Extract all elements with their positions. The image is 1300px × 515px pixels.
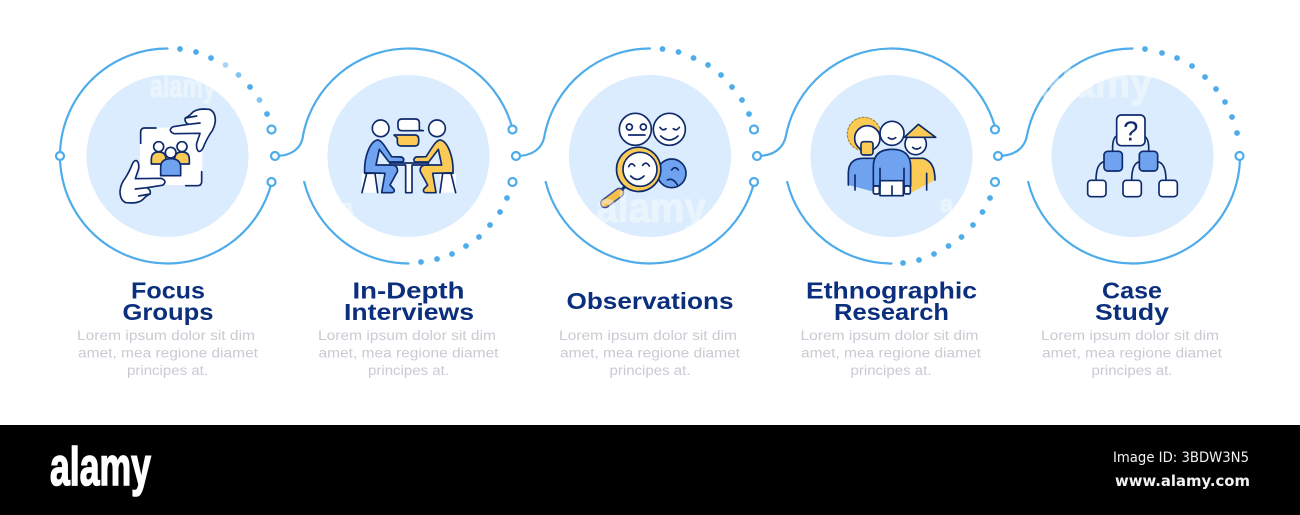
footer bar bbox=[0, 425, 1300, 515]
heading: Case bbox=[1102, 278, 1162, 304]
body text bbox=[559, 328, 740, 378]
background circle bbox=[328, 75, 490, 237]
icon: hands framing a group bbox=[120, 109, 215, 203]
watermarks: alamy bbox=[150, 68, 216, 104]
body text: Lorem ipsum dolor sit dim bbox=[559, 328, 737, 343]
panel: in-depth interviews bbox=[271, 49, 516, 378]
background circle bbox=[569, 75, 731, 237]
website: www.alamy.com bbox=[1115, 472, 1250, 490]
heading bbox=[344, 278, 474, 325]
body text bbox=[1041, 328, 1222, 378]
body text: Lorem ipsum dolor sit dim bbox=[318, 328, 496, 343]
heading: Ethnographic bbox=[806, 278, 977, 304]
background circle bbox=[86, 75, 248, 237]
heading: Research bbox=[834, 299, 949, 325]
icon: decision tree with question mark: ? bbox=[1123, 116, 1138, 147]
alamy logo: alamy bbox=[50, 437, 151, 497]
panel: ethnographic research bbox=[753, 49, 999, 378]
ring with dots bbox=[753, 49, 999, 266]
body text: Lorem ipsum dolor sit dim bbox=[800, 328, 978, 343]
ring with dots bbox=[271, 49, 516, 265]
panel: case study bbox=[994, 46, 1244, 378]
background circle bbox=[810, 75, 972, 237]
heading: Groups bbox=[122, 299, 214, 325]
body text: amet, mea regione diamet bbox=[560, 346, 740, 360]
background circle bbox=[1052, 75, 1214, 237]
body text bbox=[318, 328, 499, 378]
icon: decision tree with question mark bbox=[1088, 115, 1177, 197]
watermarks bbox=[150, 59, 1153, 231]
heading: Interviews bbox=[344, 299, 474, 325]
ring with dots bbox=[994, 46, 1244, 263]
watermarks: a bbox=[342, 197, 354, 219]
body text: principes at. bbox=[368, 363, 449, 378]
panel: observations bbox=[512, 46, 758, 378]
heading: In-Depth bbox=[352, 278, 464, 304]
watermarks: a bbox=[940, 191, 954, 218]
heading: Study bbox=[1095, 299, 1169, 325]
ring with dots bbox=[512, 46, 758, 263]
ring with dots bbox=[56, 46, 276, 263]
icon: three diverse people bbox=[847, 117, 936, 196]
heading bbox=[806, 278, 977, 325]
heading: Focus bbox=[131, 278, 205, 304]
body text: principes at. bbox=[610, 363, 690, 378]
body text bbox=[77, 328, 258, 378]
watermarks: alamy bbox=[1040, 59, 1153, 106]
heading: Observations bbox=[566, 288, 734, 314]
watermarks: alamy bbox=[596, 184, 707, 231]
heading bbox=[122, 278, 214, 325]
body text: Lorem ipsum dolor sit dim bbox=[77, 328, 255, 343]
body text: amet, mea regione diamet bbox=[1042, 346, 1222, 360]
icon: magnifier over emotion faces bbox=[605, 113, 686, 203]
body text: principes at. bbox=[1092, 363, 1172, 378]
panel: focus groups bbox=[56, 46, 276, 378]
heading bbox=[1095, 278, 1169, 325]
body text: principes at. bbox=[850, 363, 932, 378]
body text: Lorem ipsum dolor sit dim bbox=[1041, 328, 1219, 343]
icon: two people talking at a table bbox=[362, 119, 456, 193]
body text: amet, mea regione diamet bbox=[318, 346, 499, 360]
body text: amet, mea regione diamet bbox=[801, 346, 981, 360]
body text bbox=[800, 328, 981, 378]
body text: amet, mea regione diamet bbox=[78, 346, 258, 360]
image id: Image ID: 3BDW3N5 bbox=[1113, 450, 1249, 466]
body text: principes at. bbox=[127, 363, 208, 378]
